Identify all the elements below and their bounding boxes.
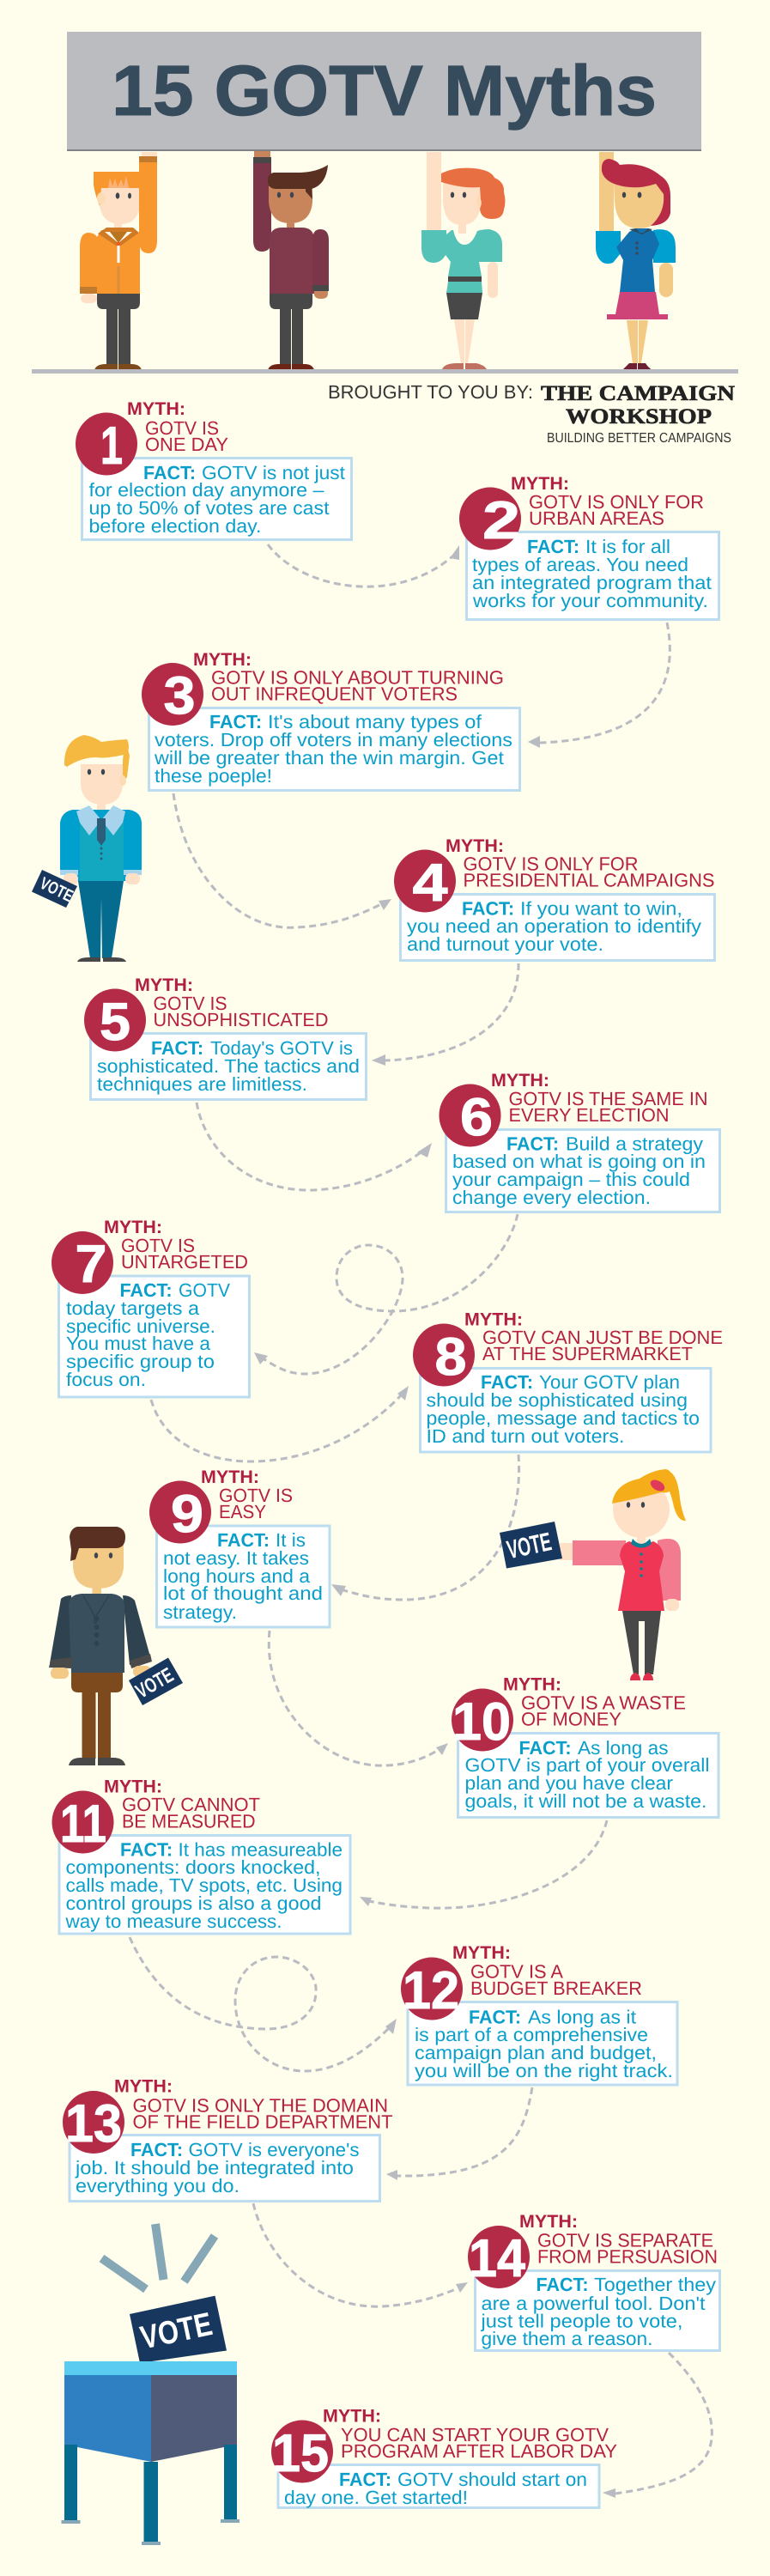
myth 6 (440, 1071, 719, 1212)
number badge: 15 (272, 2424, 329, 2483)
myth statement: GOTV IS ONLY FOR (529, 491, 704, 513)
arrow: myth 13 to 14 (253, 2203, 468, 2306)
myth 8 (413, 1310, 723, 1452)
ground line (32, 369, 738, 374)
fact text: FACT: (481, 1371, 533, 1393)
fact text (154, 711, 512, 787)
fact box (408, 2002, 677, 2085)
number badge: 14 (469, 2229, 525, 2288)
arrow: myth 5 to 6 (197, 1103, 432, 1190)
fact text: specific universe. (66, 1315, 215, 1337)
myth statement: FROM PERSUASION (537, 2246, 718, 2267)
fact text: FACT: (130, 2139, 183, 2160)
ballot box (62, 2224, 239, 2545)
fact text: Your GOTV plan (539, 1371, 680, 1393)
fact text: Build a strategy (566, 1133, 703, 1154)
fact text (163, 1529, 323, 1623)
myth statement: GOTV IS A (470, 1961, 563, 1982)
fact text: long hours and a (163, 1565, 311, 1587)
myth statement: URBAN AREAS (529, 507, 664, 529)
myth statement: GOTV IS ONLY THE DOMAIN (132, 2095, 388, 2116)
number badge (394, 850, 456, 913)
fact text: FACT: (120, 1279, 172, 1301)
myth 3 (142, 650, 520, 790)
fact text: FACT: (339, 2469, 391, 2490)
myth statement: MYTH: (104, 1218, 162, 1237)
myth statement (511, 474, 704, 529)
myth statement: GOTV IS SEPARATE (537, 2229, 713, 2251)
fact text: It is for all (585, 536, 670, 557)
number badge (52, 1231, 113, 1294)
fact box (421, 1369, 711, 1452)
fact text (89, 462, 345, 537)
fact text: It is (276, 1529, 306, 1551)
myth statement (114, 2076, 393, 2133)
myth statement: MYTH: (452, 1943, 511, 1963)
fact text (415, 2006, 673, 2081)
myth statement: GOTV IS ONLY FOR (464, 854, 639, 874)
fact box (70, 2135, 379, 2202)
myth statement (503, 1674, 686, 1729)
fact text: voters. Drop off voters in many elections (155, 729, 512, 750)
number badge: 13 (65, 2094, 122, 2154)
arrow: myth 6 to 7 with loop (254, 1214, 518, 1374)
myth statement: MYTH: (135, 975, 193, 995)
fact text: goals, it will not be a waste. (465, 1790, 707, 1812)
fact text: not easy. It takes (163, 1547, 309, 1569)
fact box (278, 2464, 599, 2507)
myth 2 (459, 474, 719, 620)
fact text: job. It should be integrated into (75, 2157, 354, 2178)
fact box (476, 2270, 719, 2351)
myth 14 (468, 2212, 719, 2351)
myth statement (491, 1071, 707, 1126)
person: woman in teal top (421, 152, 505, 369)
fact text: Together they (594, 2274, 716, 2295)
fact text: control groups is also a good (65, 1893, 321, 1914)
myth statement: MYTH: (464, 1310, 523, 1329)
person: man in maroon sweater (253, 151, 329, 370)
fact text: GOTV should start on (397, 2469, 587, 2490)
myth statement: MYTH: (491, 1071, 549, 1091)
credit: brought to you by: THE CAMPAIGN (541, 382, 735, 405)
fact text: before election day. (89, 515, 261, 537)
fact text: you will be on the right track. (415, 2060, 673, 2081)
fact box (400, 895, 714, 960)
title sign (67, 32, 701, 151)
fact text: are a powerful tool. Don't (481, 2293, 706, 2314)
fact text: you need an operation to identify (407, 915, 701, 937)
credit: brought to you by: WORKSHOP (566, 405, 712, 428)
fact text: based on what is going on in (452, 1151, 706, 1172)
myth statement: MYTH: (193, 650, 252, 670)
fact box (156, 1526, 330, 1627)
number badge (84, 989, 146, 1052)
myth 4 (394, 836, 714, 960)
number badge: 9 (171, 1485, 203, 1544)
vote card (500, 1522, 562, 1568)
myth statement: GOTV CANNOT (122, 1794, 260, 1815)
fact text: FACT: (217, 1529, 270, 1551)
fact text: FACT: (462, 898, 514, 919)
myth statement: OF MONEY (521, 1709, 621, 1729)
credit: brought to you by (328, 381, 735, 446)
number badge: 10 (452, 1692, 511, 1752)
fact text: sophisticated. The tactics and (97, 1055, 360, 1077)
fact text (426, 1371, 700, 1447)
myth 5 (84, 975, 366, 1099)
fact text: will be greater than the win margin. Get (154, 747, 504, 769)
fact text: FACT: (536, 2274, 589, 2295)
number badge: 11 (60, 1795, 106, 1854)
arrow: myth 8 to 9 (331, 1455, 519, 1600)
myth statement: YOU CAN START YOUR GOTV (341, 2424, 609, 2445)
fact text: campaign plan and budget, (415, 2042, 657, 2063)
fact text: GOTV is not just (202, 462, 345, 483)
myth statement: MYTH: (503, 1674, 561, 1695)
number badge (76, 412, 137, 476)
myth statement: OF THE FIELD DEPARTMENT (132, 2111, 393, 2133)
myth statement: GOTV CAN JUST BE DONE (482, 1327, 723, 1348)
fact box (458, 1733, 718, 1817)
fact text (465, 1737, 709, 1812)
fact text: FACT: (506, 1133, 559, 1154)
myth statement: MYTH: (104, 1777, 162, 1796)
arrow: myth 3 to 4 (173, 793, 391, 927)
myth statement: MYTH: (519, 2212, 578, 2232)
fact text: FACT: (527, 536, 579, 557)
fact text: ID and turn out voters. (426, 1425, 625, 1447)
arrow: myth 14 to 15 (603, 2353, 712, 2498)
number badge: 7 (76, 1235, 106, 1294)
myth statement (201, 1467, 293, 1522)
myth statement: AT THE SUPERMARKET (482, 1343, 693, 1364)
number badge: 3 (163, 666, 196, 726)
fact box (58, 1276, 249, 1397)
fact text (284, 2469, 587, 2508)
fact text: specific group to (66, 1351, 215, 1372)
fact text: everything you do. (76, 2175, 239, 2196)
myth statement: MYTH: (511, 474, 569, 494)
vote card: VOTE (132, 1663, 178, 1704)
fact text: techniques are limitless. (97, 1073, 307, 1095)
fact text: your campaign – this could (452, 1169, 690, 1190)
number badge: 6 (460, 1088, 493, 1147)
fact text (64, 1839, 343, 1932)
arrow: myth 4 to 5 (372, 963, 518, 1066)
fact text (407, 898, 701, 955)
fact text (480, 2274, 716, 2349)
credit: brought to you by: BUILDING BETTER CAMPAIGNS (547, 431, 731, 446)
fact text (472, 536, 712, 611)
myth statement: EVERY ELECTION (508, 1104, 670, 1126)
fact text (75, 2139, 360, 2196)
fact text: for election day anymore – (89, 479, 324, 501)
arrow: myth 2 to 3 (528, 623, 670, 748)
arrow: myth 10 to 11 (360, 1820, 607, 1908)
fact text: is part of a comprehensive (415, 2024, 648, 2045)
myth statement (452, 1943, 642, 1999)
fact text: give them a reason. (481, 2328, 652, 2349)
fact text: just tell people to vote, (480, 2310, 683, 2332)
fact text: day one. Get started! (284, 2487, 468, 2508)
number badge (459, 488, 521, 550)
fact text: people, message and tactics to (426, 1407, 700, 1429)
myth statement (323, 2406, 617, 2462)
fact text: It's about many types of (268, 711, 482, 732)
myth statement (519, 2212, 718, 2267)
number badge: 5 (100, 993, 130, 1052)
character: brown-haired man with vote card (49, 1527, 183, 1765)
myth statement: GOTV IS ONLY ABOUT TURNING (211, 666, 504, 689)
fact text: lot of thought and (163, 1583, 323, 1604)
fact text: GOTV (179, 1279, 230, 1301)
arrow: myth 9 to 10 (269, 1631, 448, 1765)
fact text: and turnout your vote. (407, 933, 603, 955)
arrow: myth 11 to 12 with loop (130, 1937, 397, 2071)
fact box (149, 708, 520, 790)
number badge (142, 663, 203, 726)
myth statement (104, 1218, 248, 1273)
myth statement (127, 399, 228, 455)
fact text: It has measureable (179, 1839, 343, 1860)
myth statement: UNSOPHISTICATED (153, 1009, 328, 1030)
fact text: types of areas. You need (472, 554, 688, 575)
fact text: GOTV is everyone's (189, 2139, 359, 2160)
fact text: FACT: (120, 1839, 173, 1860)
vote card: VOTE (505, 1528, 554, 1564)
motion rays (101, 2224, 215, 2289)
myth statement: MYTH: (114, 2076, 173, 2097)
myth statement: BUDGET BREAKER (470, 1978, 642, 1999)
myth statement (193, 650, 504, 704)
myth statement: GOTV IS A WASTE (521, 1692, 686, 1714)
myth statement: PRESIDENTIAL CAMPAIGNS (464, 869, 714, 891)
fact text: an integrated program that (472, 572, 712, 593)
myth statement (104, 1777, 260, 1832)
fact text: You must have a (66, 1333, 211, 1354)
myth statement: GOTV IS (219, 1485, 293, 1506)
fact text (66, 1279, 230, 1390)
number badge: 4 (412, 854, 448, 913)
number badge: 2 (482, 491, 520, 550)
people holding the sign (80, 151, 676, 370)
myth statement: BE MEASURED (122, 1810, 256, 1832)
fact box (59, 1836, 350, 1934)
person: woman in blue top and pink skirt (596, 152, 676, 370)
fact text: If you want to win, (520, 898, 682, 919)
fact text: these poeple! (155, 765, 272, 787)
myth statement: GOTV IS THE SAME IN (508, 1088, 707, 1109)
myth statement: GOTV IS (145, 417, 219, 439)
number badge: 1 (100, 416, 123, 476)
myth 7 (52, 1218, 249, 1397)
fact text: FACT: (518, 1737, 572, 1759)
myth statement: UNTARGETED (121, 1251, 248, 1273)
fact text: way to measure success. (64, 1911, 282, 1932)
myth 13 (63, 2076, 393, 2202)
arrow: myth 12 to 13 (386, 2087, 532, 2180)
myth statement: OUT INFREQUENT VOTERS (211, 683, 458, 704)
fact text: FACT: (151, 1037, 203, 1059)
myth statement: GOTV IS (121, 1235, 195, 1256)
myth 11 (52, 1777, 350, 1934)
title: 15 GOTV Myths (112, 51, 657, 131)
fact box (467, 532, 719, 620)
number badge (149, 1480, 211, 1544)
fact text: change every election. (452, 1187, 651, 1208)
myth 9 (149, 1467, 330, 1627)
myth statement: MYTH: (323, 2406, 381, 2427)
myth statement: GOTV IS (153, 993, 227, 1014)
fact box (91, 1034, 366, 1099)
fact text: plan and you have clear (465, 1772, 673, 1794)
myth statement (464, 1310, 723, 1364)
fact text: up to 50% of votes are cast (89, 497, 330, 519)
fact text (97, 1037, 360, 1095)
fact text (452, 1133, 706, 1208)
arrow: myth 7 to 8 (151, 1386, 409, 1461)
fact text: Today's GOTV is (210, 1037, 353, 1059)
myth 12 (401, 1943, 677, 2085)
character: blond man with vote card (32, 735, 142, 962)
myth statement: EASY (219, 1501, 266, 1522)
credit: brought to you by: BROUGHT TO YOU BY: (328, 381, 533, 403)
fact text: FACT: (209, 711, 262, 732)
vote card: VOTE (37, 874, 76, 906)
vote card (32, 870, 77, 908)
fact text: As long as (578, 1737, 668, 1759)
arrow: myth 1 to 2 (268, 544, 459, 586)
character: woman in red with vote card (500, 1469, 686, 1680)
myth 1 (76, 399, 352, 539)
fact text: FACT: (469, 2006, 521, 2028)
fact text: components: doors knocked, (65, 1856, 321, 1878)
number badge (413, 1324, 475, 1387)
fact text: calls made, TV spots, etc. Using (65, 1874, 343, 1896)
fact text: strategy. (163, 1601, 237, 1623)
fact text: GOTV is part of your overall (465, 1754, 709, 1776)
myth statement: ONE DAY (145, 434, 228, 455)
fact box (446, 1130, 719, 1212)
fact text: focus on. (66, 1369, 146, 1390)
vote ballot: VOTE (137, 2306, 215, 2357)
myth statement (446, 836, 714, 891)
fact text: today targets a (66, 1297, 200, 1319)
fact text: As long as it (528, 2006, 636, 2028)
fact text: works for your community. (472, 590, 708, 611)
myth statement (135, 975, 328, 1030)
myth statement: MYTH: (446, 836, 504, 856)
fact text: should be sophisticated using (426, 1389, 688, 1411)
number badge: 12 (403, 1961, 459, 2020)
myth 15 (271, 2406, 617, 2508)
myth statement: MYTH: (201, 1467, 259, 1487)
person: man in orange jacket (80, 152, 157, 370)
myth statement: MYTH: (127, 399, 185, 419)
number badge: 8 (434, 1327, 467, 1387)
fact box (82, 459, 352, 539)
number badge (440, 1084, 501, 1147)
myth 10 (452, 1674, 718, 1817)
myth statement: PROGRAM AFTER LABOR DAY (341, 2440, 617, 2462)
fact text: FACT: (143, 462, 196, 483)
